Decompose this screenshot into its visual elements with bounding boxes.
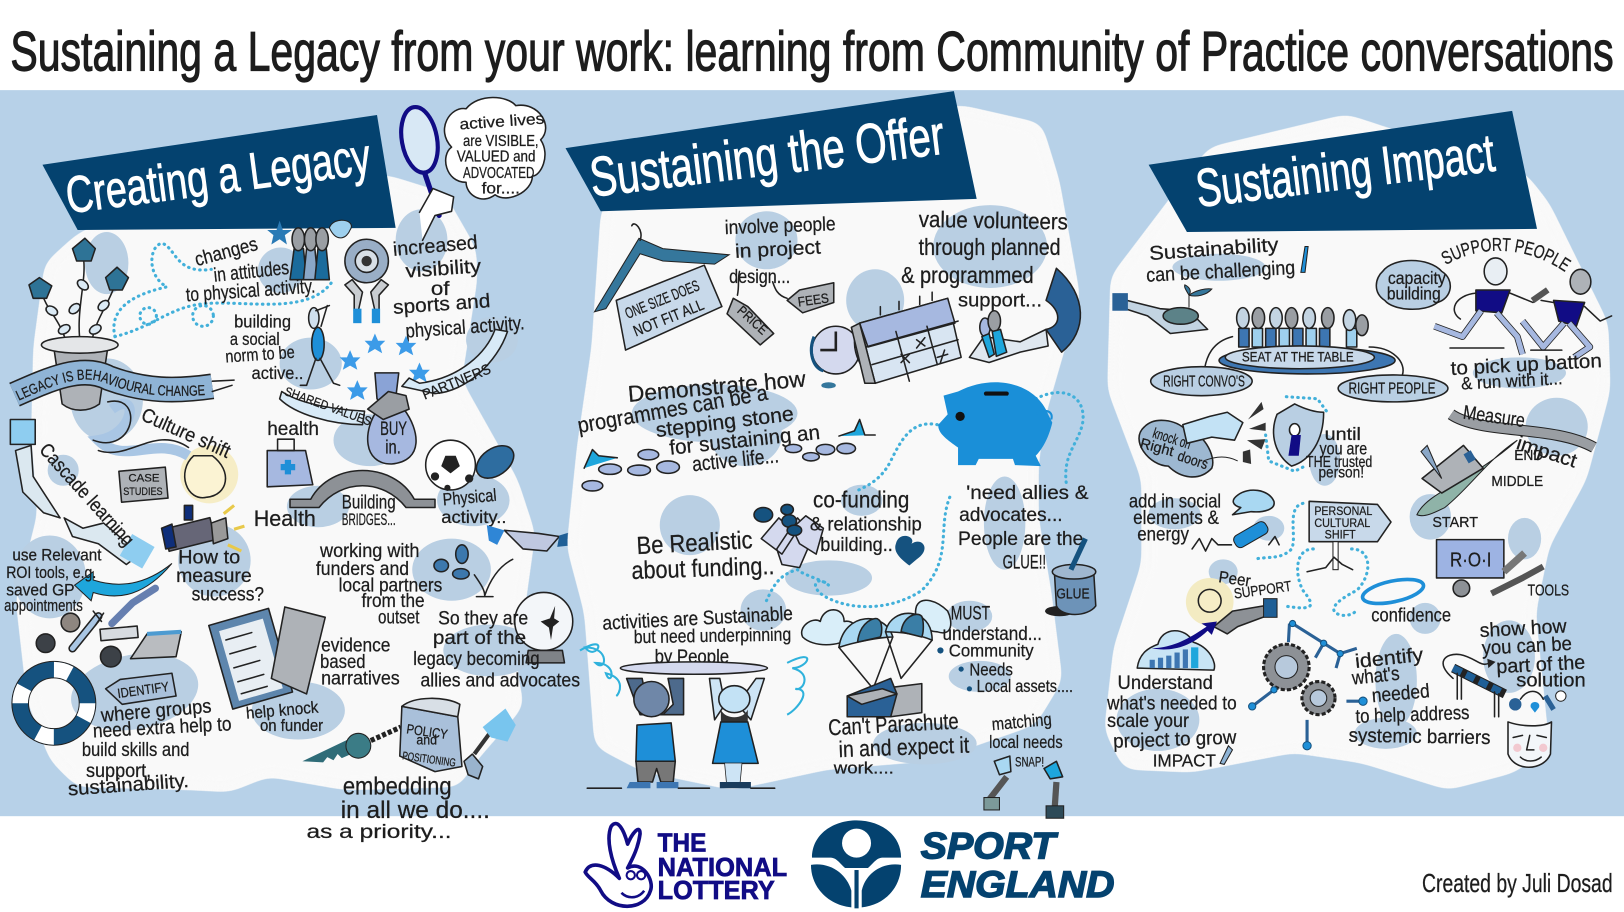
case studies box: STUDIES <box>123 486 163 498</box>
text: to pick up batton <box>1450 350 1602 393</box>
measure tape and road: START <box>1432 515 1478 531</box>
text: understand what's needed <box>1106 672 1238 770</box>
right convos bubble <box>1151 337 1252 396</box>
text: until you are the trusted person <box>1306 424 1372 481</box>
text: must understand: MUST <box>951 602 990 624</box>
text: health building bridges: Building <box>342 492 396 514</box>
text: matching local needs with hands: matching <box>991 709 1052 734</box>
text: how to measure success: How to <box>178 546 240 568</box>
dotted paths to piggy bank <box>766 393 1083 607</box>
banner: Creating a Legacy: Creating a Legacy <box>62 127 374 224</box>
ribbon: legacy is behavioural change: LEGACY IS BEHAVIOURAL CHANGE <box>15 369 205 400</box>
text: value volunteers <box>901 206 1068 312</box>
thought bubble: active lives: are VISIBLE, <box>463 133 539 150</box>
ROI plate and tools <box>1437 540 1569 600</box>
text: how to measure success <box>176 546 264 606</box>
piggy bank <box>938 382 1052 466</box>
text: identify what's needed: what's <box>1350 663 1401 690</box>
text: must understand <box>937 602 1073 696</box>
panel: sustaining the offer <box>566 91 1096 818</box>
text: add in social elements: add in social <box>1129 491 1221 513</box>
buy in bag with shared values and partners: BUY <box>380 418 407 440</box>
clipboard and door <box>209 607 325 709</box>
text: need allies: advocates... <box>959 504 1063 526</box>
text: so they are part of the legacy: So they are <box>438 608 528 630</box>
buy in bag with shared values and partners <box>280 329 508 464</box>
capacity building cloud <box>1376 261 1450 309</box>
text: need allies: People are the <box>958 528 1083 550</box>
buy in bag with shared values and partners: PARTNERS <box>420 362 493 404</box>
text: activities are sustainable: activities are Sustainable <box>602 603 793 635</box>
health bag <box>267 418 319 487</box>
ROI plate and tools: TOOLS <box>1528 583 1569 600</box>
banner: Sustaining Impact: Sustaining Impact <box>1192 123 1498 219</box>
coat hanger with one size sign: ONE SIZE DOES <box>623 277 702 323</box>
logo: Sport England: SPORT <box>921 825 1059 867</box>
text: help knock on funder: on funder <box>260 716 324 735</box>
text: embedding in all we do <box>307 773 490 843</box>
confidence ring: confidence <box>1371 604 1451 626</box>
text: where groups need extra help <box>67 695 232 800</box>
trusted person shield <box>1266 397 1329 471</box>
head with ideas <box>1508 691 1566 767</box>
text: understand what's needed: scale your <box>1107 710 1189 732</box>
text: must understand: understand... <box>943 623 1042 645</box>
text: identify what's needed: systemic barriers <box>1348 725 1491 749</box>
football and trainer <box>426 439 520 491</box>
text: working with funders: working with <box>319 540 419 562</box>
confidence ring <box>1360 575 1451 626</box>
seat at the table: SEAT AT THE TABLE <box>1242 349 1354 364</box>
case studies box: CASE <box>128 473 160 485</box>
price tag: PRICE <box>734 303 771 338</box>
stepping stones <box>582 419 875 491</box>
measure tape and road: MIDDLE <box>1491 474 1544 490</box>
text: ROI tools: saved GP <box>6 581 75 600</box>
shaded accent blobs <box>1116 254 1588 751</box>
people group icon <box>267 220 351 280</box>
right people bubble <box>1338 347 1448 402</box>
text: physical activity <box>441 485 506 527</box>
text: can't parachute: Can't Parachute <box>827 708 959 740</box>
text: working with funders: outset <box>378 607 420 629</box>
text: evidence based narratives <box>320 634 400 690</box>
barrier with arrow <box>1443 654 1505 717</box>
text: increased visibility: visibility <box>405 255 482 283</box>
text: co-funding <box>810 487 922 556</box>
ribbon: legacy is behavioural change <box>9 360 235 406</box>
coins and coin toss <box>434 545 513 597</box>
key and policy book: POSITIONING <box>401 750 456 770</box>
text: changes in attitudes: changes <box>192 233 260 271</box>
text: help knock on funder <box>245 697 324 735</box>
text: so they are part of the legacy <box>413 608 580 692</box>
text: evidence based narratives: narratives <box>321 668 400 690</box>
text: changes in attitudes: to physical activity. <box>185 275 316 306</box>
knock on right doors cloud with fist: knock on <box>1150 426 1193 453</box>
logo: The National Lottery: THE <box>658 829 706 857</box>
thought bubble: active lives: VALUED and <box>457 149 535 166</box>
hand with feather duster <box>464 708 516 779</box>
text: understand what's needed: what's needed to <box>1106 692 1237 714</box>
text: involve people in project design <box>724 213 836 288</box>
peer support <box>1186 567 1293 634</box>
peer support: SUPPORT <box>1233 579 1293 603</box>
text: physical activity: Physical <box>442 485 497 509</box>
text: value volunteers: & programmed <box>901 262 1034 288</box>
text: must understand: Needs <box>969 659 1013 679</box>
health bag: health <box>267 418 319 440</box>
magnifying glass with hand <box>396 104 454 240</box>
text: show how part of the solution: you can be <box>1481 633 1572 660</box>
stick figure <box>300 306 340 385</box>
text: where groups need extra help: support, <box>86 760 151 782</box>
fees tag: FEES <box>797 290 830 310</box>
text: health building bridges: Health <box>254 506 316 531</box>
signpost: personal cultural shift: SHIFT <box>1325 528 1356 542</box>
price tag <box>727 271 774 345</box>
text: changes in attitudes: in attitudes <box>213 257 290 287</box>
thought bubble: active lives <box>444 98 546 199</box>
text: co-funding: & relationship <box>810 513 922 535</box>
clouds and parachutes with box <box>802 600 951 717</box>
text: need allies: 'need allies & <box>966 482 1089 504</box>
text: understand what's needed: project to grow <box>1113 726 1238 753</box>
thought bubble: active lives: active lives <box>459 111 545 133</box>
text: matching local needs with hands: local needs <box>989 732 1063 752</box>
arrow to ROI tools <box>75 563 172 601</box>
text: building a social norm <box>225 311 303 383</box>
text: so they are part of the legacy: allies and advocates <box>421 670 580 692</box>
text: show how part of the solution: show how <box>1479 615 1568 642</box>
text: embedding in all we do: in all we do.... <box>341 797 490 824</box>
text: identify what's needed <box>1348 644 1491 749</box>
text: sustainability can be challenging <box>1146 234 1308 287</box>
text: health building bridges: BRIDGES... <box>342 510 396 529</box>
energy bottle and heartbeat <box>1192 520 1279 551</box>
text: building a social norm: norm to be <box>225 342 295 367</box>
text: involve people in project design: involve people <box>724 213 836 239</box>
culture shift light bulb <box>93 401 238 503</box>
background band <box>0 90 1624 816</box>
identify tag: IDENTIFY <box>116 679 170 701</box>
right convos bubble: RIGHT CONVO'S <box>1163 373 1245 390</box>
text: show how part of the solution <box>1479 615 1586 692</box>
ROI plate and tools: R·O·I <box>1450 549 1491 572</box>
text: co-funding: building.. <box>820 534 893 556</box>
text: can't parachute: in and expect it <box>838 732 970 762</box>
heart <box>895 536 925 566</box>
text: increased visibility: of <box>431 278 450 300</box>
cyan dotted paths <box>1253 503 1368 615</box>
text: to pick up batton: to pick up batton <box>1450 350 1602 380</box>
key and policy book: POLICY <box>406 721 449 742</box>
text: can't parachute <box>827 708 970 778</box>
glue pot: GLUE <box>1056 587 1090 603</box>
text: increased visibility <box>392 232 525 343</box>
text: until you are the trusted person: you are <box>1320 439 1367 459</box>
key and policy book: and <box>416 733 437 748</box>
clock <box>811 326 860 388</box>
hand holding people <box>969 268 1080 363</box>
text: working with funders: local partners <box>339 574 442 596</box>
text: activities are sustainable: but need underpinning <box>634 623 791 647</box>
text: show how part of the solution: solution <box>1516 670 1586 692</box>
culture shift light bulb: Culture shift <box>138 404 234 463</box>
text: value volunteers: value volunteers <box>919 206 1068 234</box>
coat hanger with one size sign <box>594 224 729 350</box>
text: value volunteers: through planned <box>919 234 1061 260</box>
measure tape and road <box>1417 402 1594 531</box>
text: changes in attitudes <box>185 233 316 306</box>
text: so they are part of the legacy: legacy becoming <box>413 648 540 670</box>
text: so they are part of the legacy: part of the <box>433 627 526 649</box>
calendar <box>851 292 961 383</box>
text: working with funders: from the <box>361 590 425 612</box>
text: identify what's needed: identify <box>1354 644 1424 673</box>
text: evidence based narratives: evidence <box>321 634 391 656</box>
text: matching local needs with hands <box>984 709 1064 818</box>
measure tape and road: END <box>1514 448 1543 464</box>
logo: The National Lottery: NATIONAL <box>658 854 787 882</box>
bridge <box>290 470 435 508</box>
runners passing baton <box>1434 258 1612 357</box>
text: embedding in all we do: embedding <box>343 773 452 800</box>
text: can't parachute: work.... <box>833 759 894 778</box>
text: where groups need extra help: need extra help to <box>92 713 232 742</box>
text: to pick up batton: & run with it... <box>1461 368 1563 393</box>
text: working with funders: funders and <box>316 558 409 580</box>
panel: creating a legacy <box>4 96 580 843</box>
text: support people: SUPPORT PEOPLE <box>1441 238 1572 272</box>
text: be realistic about funding: about funding.. <box>631 553 775 585</box>
cascade learning hands: Cascade learning <box>35 439 138 551</box>
peer support: Peer <box>1217 567 1252 591</box>
video camera <box>162 505 244 551</box>
shaded accent blobs <box>13 209 536 740</box>
text: until you are the trusted person: THE trusted <box>1306 454 1372 471</box>
buy in bag with shared values and partners: in. <box>385 437 401 459</box>
signpost: personal cultural shift <box>1307 501 1391 572</box>
measure tape and road: Measure <box>1462 402 1526 432</box>
logo: The National Lottery <box>585 824 787 906</box>
text: add in social elements: energy <box>1137 524 1189 546</box>
text: identify what's needed: needed <box>1371 680 1431 707</box>
seat at the table <box>1219 308 1395 374</box>
text: sustainability can be challenging: Sustainability <box>1148 234 1279 265</box>
text: where groups need extra help: where groups <box>99 695 212 727</box>
text: add in social elements: elements & <box>1133 507 1219 529</box>
glue pot <box>1045 539 1096 616</box>
text: how to measure success: measure <box>176 565 252 587</box>
signpost: personal cultural shift: PERSONAL <box>1314 504 1372 518</box>
text: until you are the trusted person: until <box>1325 424 1361 444</box>
speech bubble <box>1232 490 1274 515</box>
text: value volunteers: support... <box>958 290 1042 312</box>
text: working with funders <box>316 540 442 629</box>
knock on right doors cloud with fist <box>1138 402 1266 477</box>
text: be realistic about funding: Be Realistic <box>636 527 753 560</box>
ring held up by hands <box>345 239 388 323</box>
text: demonstrate stepping stone: programmes can be a <box>575 380 770 438</box>
panel: sustaining impact <box>1105 110 1612 789</box>
hand holding seedling <box>1112 285 1212 334</box>
knock on right doors cloud with fist: doors <box>1175 448 1210 473</box>
text: building a social norm: active.. <box>252 363 303 383</box>
text: ROI tools: appointments <box>4 596 83 615</box>
text: identify what's needed: to help address <box>1355 702 1470 728</box>
text: add in social elements <box>1129 491 1221 546</box>
text: need allies: GLUE!! <box>1003 552 1046 574</box>
case studies box <box>119 467 168 502</box>
text: building a social norm: a social <box>230 329 280 349</box>
text: increased visibility: increased <box>392 232 479 261</box>
text: matching local needs with hands: SNAP! <box>1015 754 1044 769</box>
banner: Sustaining Impact <box>1149 111 1537 232</box>
panel background blob <box>16 175 535 792</box>
buy in bag with shared values and partners: SHARED VALUES <box>283 384 373 429</box>
text: embedding in all we do: as a priority... <box>307 821 452 843</box>
measure tape and road: impact <box>1514 432 1580 473</box>
panel background blob <box>1104 114 1611 790</box>
text: ROI tools: ROI tools, e.g. <box>6 563 96 582</box>
text: demonstrate stepping stone: stepping stone <box>654 402 795 442</box>
text: building a social norm: building <box>234 311 291 331</box>
text: understand what's needed: IMPACT <box>1153 750 1216 770</box>
text: involve people in project design: design... <box>729 266 790 288</box>
text: demonstrate stepping stone: Demonstrate how <box>627 365 807 407</box>
growth cloud chart <box>1137 621 1217 670</box>
text: understand what's needed: Understand <box>1118 672 1213 694</box>
stars <box>340 334 430 400</box>
plant in pot <box>29 238 128 410</box>
gears and network <box>1249 620 1367 750</box>
text: demonstrate stepping stone: for sustaining an <box>668 421 821 460</box>
text: increased visibility: physical activity. <box>405 312 525 343</box>
text: health building bridges <box>254 492 396 531</box>
text: co-funding: co-funding <box>813 487 909 513</box>
text: show how part of the solution: part of the <box>1496 652 1586 678</box>
signpost: personal cultural shift: CULTURAL <box>1314 516 1370 530</box>
logo: Sport England <box>811 820 1114 908</box>
text: activities are sustainable: by People <box>655 646 729 668</box>
text: activities are sustainable <box>602 603 793 668</box>
banner: Sustaining the Offer: Sustaining the Offer <box>586 103 948 209</box>
text: be realistic about funding <box>631 527 775 585</box>
fees tag <box>773 282 834 313</box>
thought bubble: active lives: for.... <box>482 181 520 198</box>
tools <box>36 588 181 667</box>
text: need allies <box>958 482 1089 574</box>
coat hanger with one size sign: NOT FIT ALL <box>631 297 707 340</box>
crystal ball <box>515 592 573 663</box>
text: must understand: Local assets.... <box>977 676 1073 696</box>
squiggles <box>580 644 807 715</box>
knock on right doors cloud with fist: Right <box>1138 436 1175 460</box>
text: ROI tools <box>4 545 102 615</box>
identify tag <box>106 673 176 704</box>
text: how to measure success: success? <box>192 584 264 606</box>
text: increased visibility: sports and <box>392 290 491 319</box>
text: physical activity: activity.. <box>441 507 506 527</box>
text: evidence based narratives: based <box>320 651 366 673</box>
text: where groups need extra help: sustainability. <box>67 770 190 800</box>
key and policy book <box>302 698 462 772</box>
two people holding a table <box>587 662 775 788</box>
text: where groups need extra help: build skills and <box>82 739 190 761</box>
handshake <box>487 525 576 551</box>
text: help knock on funder: help knock <box>245 697 320 723</box>
dotted paths <box>114 243 334 337</box>
text: demonstrate stepping stone: active life... <box>691 444 780 476</box>
capacity building cloud: capacity <box>1388 268 1446 288</box>
text: demonstrate stepping stone <box>575 365 821 476</box>
text: sustainability can be challenging: can be challenging <box>1146 257 1296 287</box>
life ring <box>20 670 88 737</box>
panel background blob <box>567 105 1080 790</box>
text: until you are the trusted person: person! <box>1318 464 1364 481</box>
logo: Sport England: ENGLAND <box>921 863 1114 905</box>
text: ROI tools: use Relevant <box>12 545 102 564</box>
capacity building cloud: building <box>1387 283 1441 303</box>
money notes and coins <box>754 504 823 568</box>
logo: The National Lottery: LOTTERY <box>658 877 775 905</box>
shaded accent blobs <box>632 205 1047 764</box>
text: must understand: Community <box>949 641 1034 661</box>
thought bubble: active lives: ADVOCATED <box>463 165 534 182</box>
right people bubble: RIGHT PEOPLE <box>1349 381 1436 398</box>
text: involve people in project design: in project <box>734 236 822 263</box>
